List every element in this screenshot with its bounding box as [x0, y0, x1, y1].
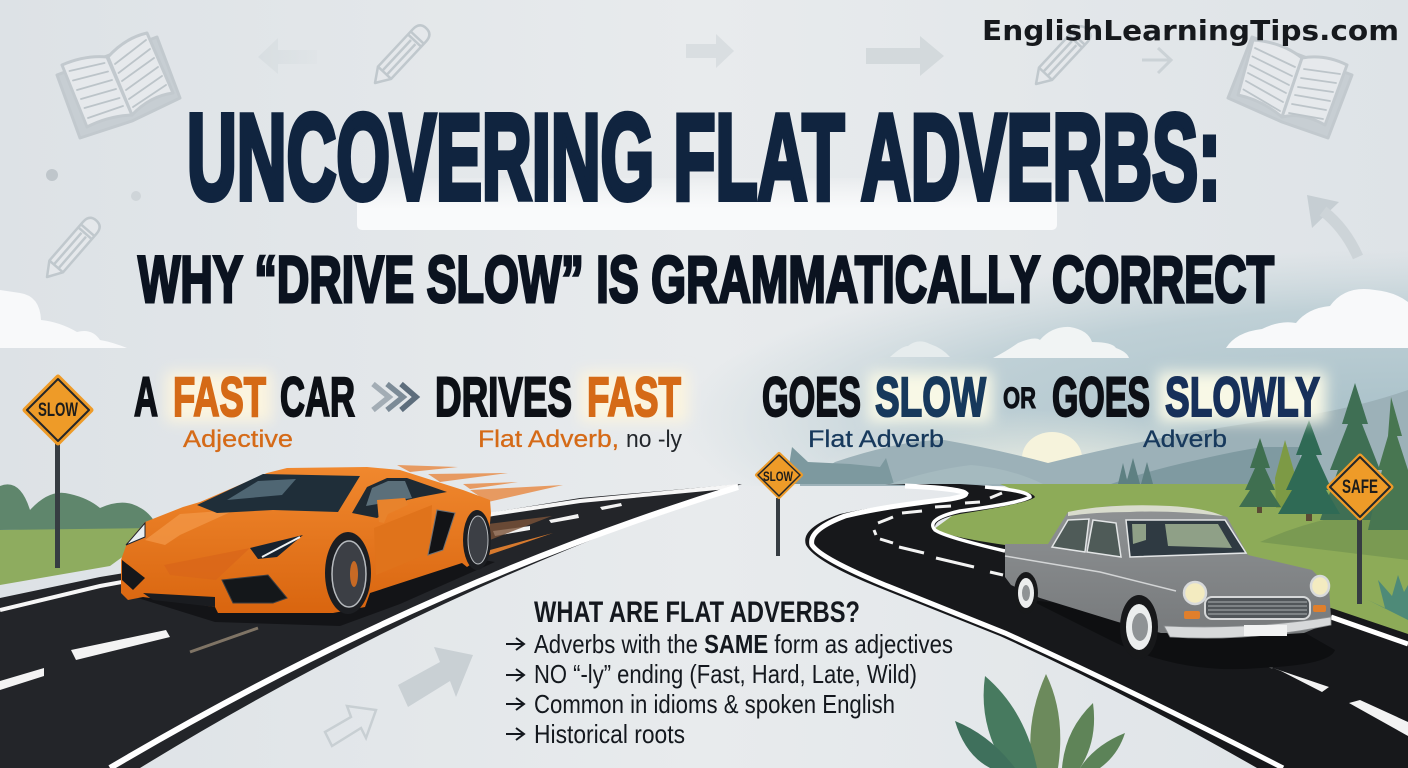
wheel rear [463, 510, 491, 570]
shrub right [1368, 575, 1408, 620]
arrow: faint right 2 [866, 36, 944, 76]
hood highlight [145, 510, 235, 545]
hill right [1111, 447, 1300, 484]
orange sports car [121, 465, 563, 626]
site name: EnglishLearningTips.com [982, 14, 1399, 47]
clouds [0, 289, 1408, 358]
sign: SAFE right: SAFE [1342, 477, 1378, 498]
label: flat adverb no -ly [478, 426, 682, 453]
icon: pencil top [368, 22, 433, 89]
side panel shade [374, 505, 432, 575]
arrow: chevrons [373, 384, 416, 410]
air intake [428, 510, 455, 555]
windshield reflection [227, 479, 296, 500]
info box: what are flat adverbs [506, 596, 953, 749]
road edge bottom [110, 487, 738, 768]
grey vintage car [1005, 505, 1335, 669]
sign: SLOW left: SLOW [38, 400, 78, 421]
meadow shadow [1260, 510, 1408, 560]
cloud left [0, 290, 127, 348]
label: flat adverb: Flat Adverb [808, 426, 944, 453]
wheel front [325, 532, 371, 614]
cloud middle [993, 327, 1129, 358]
phrase: goes slow or goes slowly [762, 365, 1320, 428]
phrase: goes slow or goes slowly: GOES [762, 365, 861, 428]
wheel front [1120, 595, 1158, 659]
headlight [250, 535, 303, 559]
car shadow [125, 556, 495, 626]
road left [0, 484, 742, 768]
phrase: goes slow or goes slowly: GOES [1052, 365, 1150, 428]
mountains front left [786, 447, 894, 484]
windshield [1126, 520, 1246, 557]
phrase: drives fast: FAST [587, 365, 681, 428]
chrome side line [1005, 556, 1176, 591]
mirror [377, 498, 408, 523]
intake right [222, 575, 287, 603]
label: adjective: Adjective [183, 426, 293, 453]
cloud right [1226, 289, 1408, 348]
road right [805, 484, 1408, 768]
road streaks [486, 516, 553, 556]
pine trees [1239, 383, 1408, 530]
front shade [164, 548, 250, 580]
grille left [122, 560, 145, 590]
icon: open book right [1228, 37, 1352, 138]
speed streaks [397, 465, 563, 502]
small trees [1118, 458, 1153, 484]
arrow: outline [325, 706, 376, 746]
bullet 1: Adverbs with the SAME form as adjectives [534, 629, 953, 659]
car body [1005, 506, 1331, 638]
text glows [166, 372, 1326, 422]
phrase: a fast car: CAR [280, 365, 355, 428]
icon: open book left [57, 33, 180, 138]
phrase: a fast car: FAST [173, 365, 266, 428]
windshield [197, 474, 360, 513]
bushes [0, 484, 158, 530]
sun [1022, 432, 1082, 484]
arrow: faint right 1 [686, 34, 734, 68]
road edge inner [933, 487, 1030, 551]
mountains mid [890, 465, 1043, 484]
mountains back [800, 390, 1408, 486]
label: adverb: Adverb [1143, 426, 1227, 453]
arrow: faint left [258, 38, 317, 74]
phrase: goes slow or goes slowly: OR [1003, 382, 1036, 415]
headlight left [126, 523, 145, 545]
label: flat adverb no -ly: no -ly [626, 426, 682, 453]
meadow [930, 484, 1408, 650]
title highlight panel [357, 178, 1057, 230]
licence plate [1244, 625, 1287, 636]
heading: WHAT ARE FLAT ADVERBS? [534, 596, 860, 629]
arrow: faint up-left [1307, 195, 1358, 257]
phrase: a fast car [134, 365, 355, 428]
sign: SLOW center [757, 454, 801, 556]
icon: pencil top right [1029, 23, 1094, 90]
scenery left [0, 484, 165, 585]
side window rear [1052, 519, 1089, 552]
lane dashes [0, 503, 622, 690]
phrase: a fast car: A [134, 365, 158, 428]
bullet 3: Common in idioms & spoken English [534, 689, 895, 719]
car shadow [1030, 600, 1335, 669]
road edge outer [812, 486, 1283, 768]
plant [955, 674, 1125, 768]
side window glass [366, 481, 412, 506]
decorative icons [40, 22, 1358, 283]
icon: pencil left [40, 214, 103, 283]
grille [1205, 597, 1310, 619]
bullet arrows [506, 638, 524, 740]
grey dash under car [1226, 647, 1273, 667]
sign: SLOW left [25, 377, 91, 568]
road edge top [0, 486, 738, 610]
bullet 2: NO “-ly” ending (Fast, Hard, Late, Wild) [534, 659, 917, 689]
indicators [1184, 605, 1326, 619]
sky wash right [680, 250, 1408, 486]
scenery right [786, 383, 1408, 650]
sign: SAFE right [1329, 456, 1391, 604]
bullet 4: Historical roots [534, 719, 685, 749]
sign: SLOW center: SLOW [763, 468, 794, 484]
arrow: faint right 3 [1142, 48, 1171, 73]
lane dashes [874, 493, 1003, 575]
cloud small [890, 341, 950, 357]
label: flat adverb no -ly: Flat Adverb, [478, 426, 619, 453]
windshield glass [1132, 524, 1232, 548]
headlight glint [262, 537, 300, 557]
roof stripe [1068, 505, 1223, 516]
splitter [143, 593, 215, 607]
grey dash [190, 628, 258, 652]
phrase: goes slow or goes slowly: SLOWLY [1165, 365, 1320, 428]
headlights [1184, 576, 1329, 604]
horizon light [812, 410, 1292, 486]
bumper [1164, 617, 1331, 638]
dot [46, 169, 58, 181]
car body [121, 467, 491, 613]
faint lower arrows [325, 647, 473, 746]
side window front [1087, 520, 1121, 557]
phrase: drives fast: DRIVES [435, 365, 572, 428]
phrase: goes slow or goes slowly: SLOW [875, 365, 986, 428]
dot small [131, 191, 141, 201]
meadow left [0, 526, 165, 585]
side window [352, 478, 447, 518]
arrow: large grey [398, 647, 473, 707]
wheel rear [1014, 572, 1038, 614]
